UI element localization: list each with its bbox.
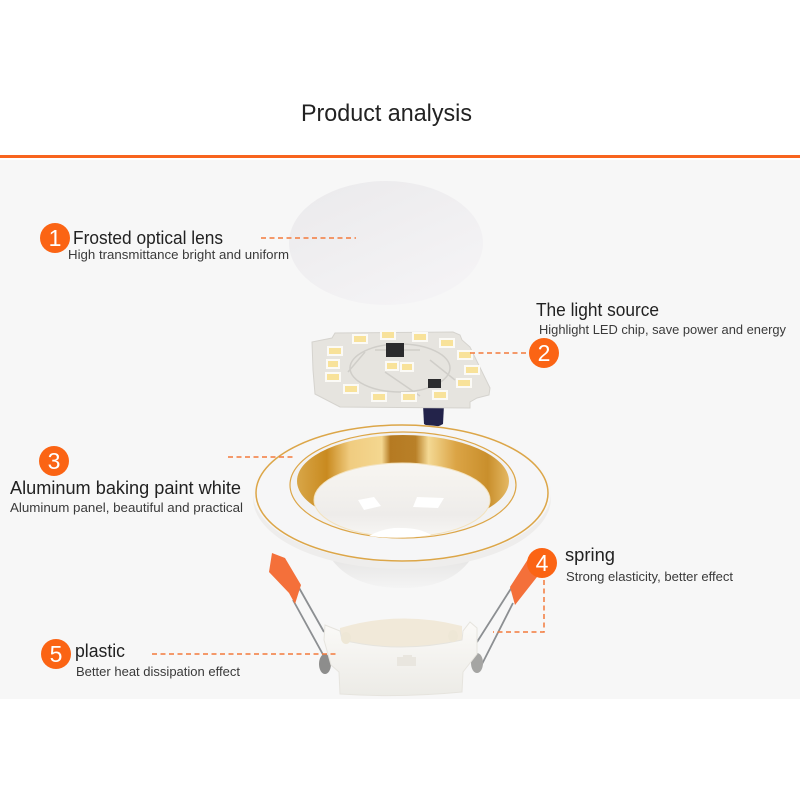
- capacitor: [423, 405, 444, 427]
- leader line 2: [470, 352, 530, 354]
- bowl highlights: [358, 497, 444, 510]
- callout 4: spring: [493, 545, 733, 632]
- inner gold line: [290, 432, 516, 538]
- callout 5: plastic: 5: [50, 641, 62, 667]
- leader line 1: [261, 237, 356, 239]
- ring underside: [326, 550, 476, 588]
- description 2: Highlight LED chip, save power and energy: [539, 322, 786, 337]
- heading 1: Frosted optical lens: [73, 228, 223, 248]
- callout 1: frosted optical lens: [40, 223, 356, 262]
- heading 5: plastic: [75, 641, 125, 661]
- heading 3: Aluminum baking paint white: [10, 478, 241, 498]
- ring rim: [253, 427, 551, 569]
- description 1: High transmittance bright and uniform: [68, 247, 289, 262]
- housing notch: [397, 655, 416, 666]
- description 3: Aluminum panel, beautiful and practical: [10, 500, 243, 515]
- left spring wires: [293, 586, 326, 660]
- leader line 3: [228, 456, 295, 458]
- background panel: [0, 160, 800, 699]
- plastic housing: [269, 553, 537, 696]
- aluminum ring: [253, 424, 551, 588]
- inner bowl: [314, 463, 490, 537]
- right spring wires: [477, 587, 513, 668]
- callout 5: plastic: [41, 639, 338, 679]
- housing pegs: [341, 632, 351, 644]
- callout 2: light source: 2: [538, 340, 550, 366]
- traces: [348, 344, 455, 396]
- right coil: [471, 653, 483, 673]
- callout 2: light source: [470, 300, 786, 368]
- badge 3: [39, 446, 69, 476]
- bowl opening: [369, 528, 431, 538]
- leader line 4: [493, 580, 544, 632]
- callout 1: frosted optical lens: 1: [49, 225, 61, 251]
- circuit board: [312, 332, 490, 408]
- frosted lens: [289, 181, 483, 305]
- orange divider: [0, 155, 800, 158]
- description 5: Better heat dissipation effect: [76, 664, 240, 679]
- left coil: [319, 654, 331, 674]
- badge 2: [529, 338, 559, 368]
- badge 5: [41, 639, 71, 669]
- control chips: [386, 343, 441, 388]
- callout 3: aluminum baking paint: 3: [48, 448, 60, 474]
- LED chips: [326, 331, 479, 401]
- heading 2: The light source: [536, 300, 659, 320]
- leader line 5: [152, 653, 338, 655]
- gold cone: [297, 435, 509, 527]
- badge 1: [40, 223, 70, 253]
- callout 3: aluminum baking paint: [10, 446, 295, 515]
- badge 4: [527, 548, 557, 578]
- housing back: [340, 618, 462, 650]
- callout 4: spring: 4: [536, 550, 549, 576]
- housing body: [324, 622, 477, 696]
- title: Product analysis: [301, 100, 472, 127]
- left spring cap: [269, 553, 301, 604]
- LED board: [312, 331, 490, 427]
- right spring cap: [510, 556, 537, 605]
- heading 4: spring: [565, 545, 615, 565]
- outer gold line: [256, 425, 548, 561]
- description 4: Strong elasticity, better effect: [566, 569, 733, 584]
